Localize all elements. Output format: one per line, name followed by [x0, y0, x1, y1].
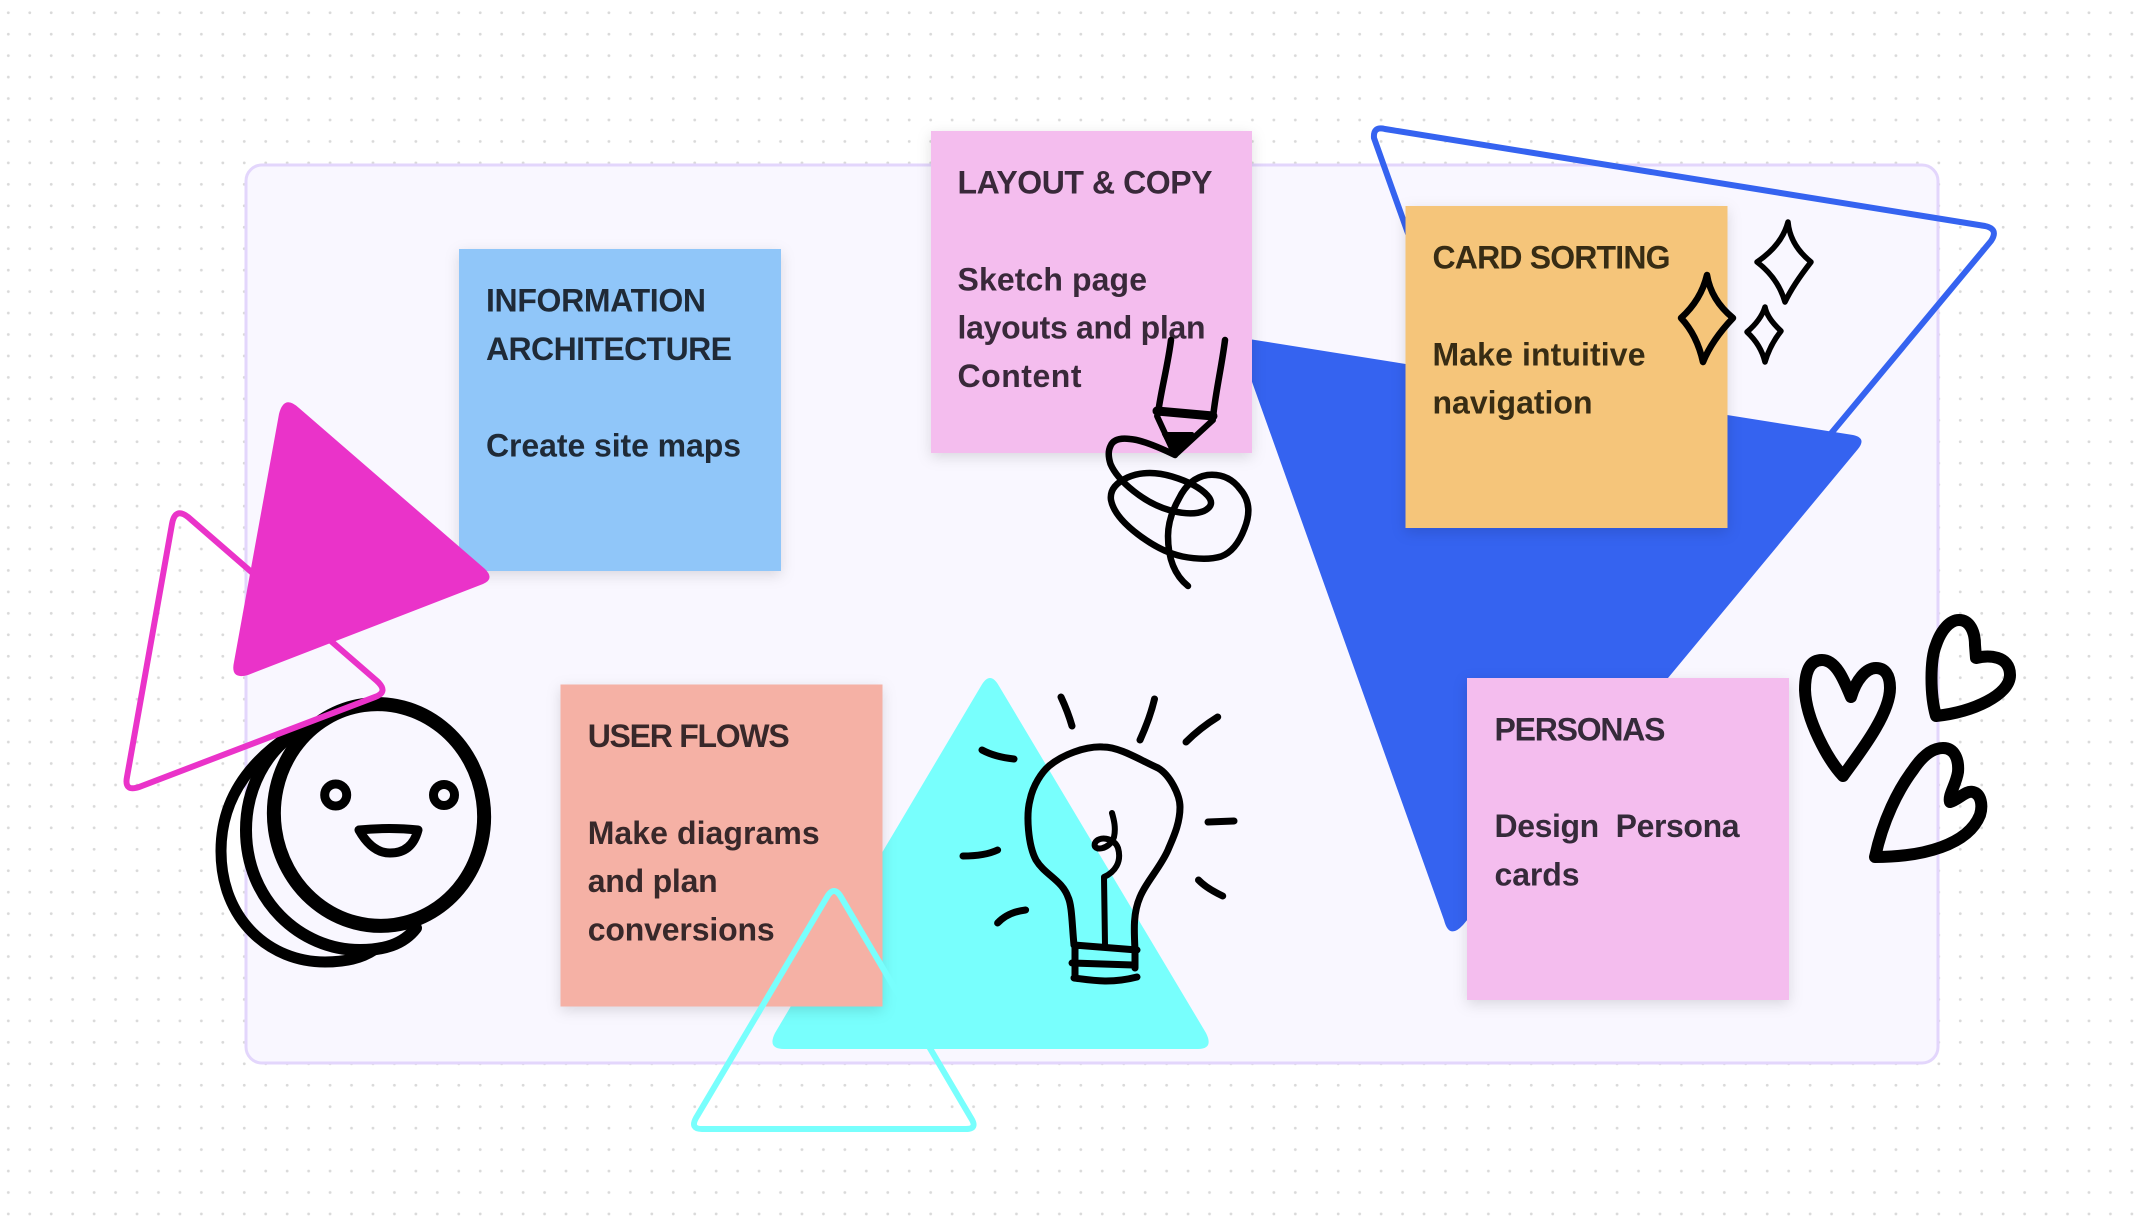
sticky note: information architecture	[459, 249, 781, 571]
sticky note: personas: Design Persona	[1494, 808, 1740, 844]
icon: hearts	[1805, 620, 2010, 857]
blue triangle outline	[1374, 128, 1994, 721]
sticky note: card sorting	[1406, 206, 1728, 528]
sticky note: personas	[1467, 678, 1789, 1000]
cyan filled triangle	[772, 678, 1209, 1049]
icon: smiley face stack	[221, 690, 498, 962]
sticky note: layout and copy: LAYOUT & COPY	[958, 165, 1212, 201]
sticky note: layout and copy: Sketch page	[958, 261, 1147, 297]
sticky note: card sorting: CARD SORTING	[1432, 240, 1670, 276]
icon: sparkles	[1681, 222, 1811, 362]
sticky note: layout and copy: Content	[958, 358, 1082, 394]
sticky note: card sorting: Make intuitive	[1432, 336, 1646, 372]
sticky note: information architecture: ARCHITECTURE	[486, 331, 732, 367]
sticky note: user flows: and plan	[588, 863, 718, 899]
sticky note: information architecture: Create site maps	[486, 428, 741, 464]
sticky note: user flows: Make diagrams	[588, 815, 820, 851]
sticky note: personas: cards	[1494, 856, 1580, 892]
blue filled triangle	[1236, 337, 1862, 931]
sticky note: user flows: conversions	[588, 912, 775, 948]
sticky note: information architecture: INFORMATION	[486, 283, 706, 319]
sticky note: layout and copy: layouts and plan	[958, 310, 1206, 346]
sticky note: personas: PERSONAS	[1494, 712, 1666, 748]
icon: pen with scribble	[1109, 340, 1248, 586]
sticky note: user flows	[560, 684, 882, 1006]
sticky note: layout and copy	[931, 131, 1252, 453]
cyan triangle outline	[694, 891, 974, 1129]
sticky note: user flows: USER FLOWS	[588, 718, 790, 754]
magenta triangle outline	[126, 513, 383, 788]
magenta filled triangle	[233, 402, 490, 676]
panel: board background	[246, 165, 1938, 1063]
icon: light bulb with rays	[963, 697, 1234, 981]
sticky note: card sorting: navigation	[1432, 385, 1592, 421]
